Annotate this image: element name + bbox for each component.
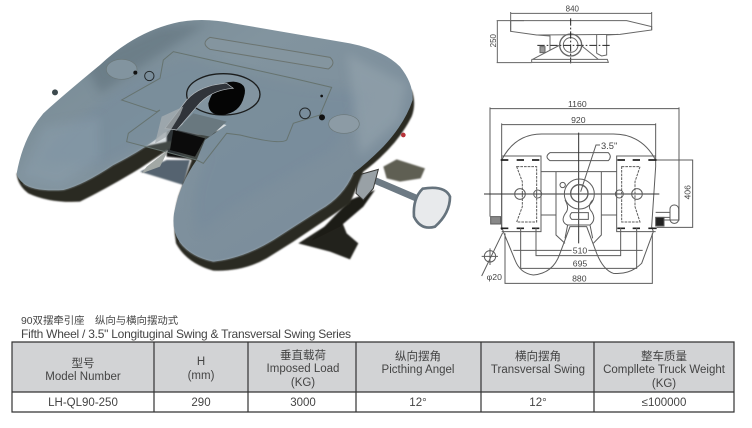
chinese heading: 90双摆牵引座 xyxy=(21,314,85,327)
red indicator xyxy=(401,133,406,137)
dimension 510 xyxy=(513,227,643,256)
specification table xyxy=(12,342,734,412)
dimension 695: 695 xyxy=(573,259,587,269)
dimension 250: 250 xyxy=(489,33,498,47)
column: transversal swing: 横向摆角 xyxy=(515,349,561,363)
angle label 3.5: 3.5" xyxy=(601,141,617,151)
column: model number xyxy=(45,356,121,409)
kingpin ring and opening xyxy=(142,74,260,173)
release handle detail xyxy=(491,205,679,226)
mounting bracket under plate xyxy=(140,127,375,259)
column: H: (mm) xyxy=(188,370,215,382)
dimension 1160: 1160 xyxy=(568,99,587,109)
dimension 406: 406 xyxy=(682,185,692,200)
column: transversal swing xyxy=(491,349,585,409)
column: pitching angle: 纵向摆角 xyxy=(395,349,441,363)
plan view drawing xyxy=(482,99,693,283)
column: truck weight: (KG) xyxy=(652,378,676,390)
column: H: 290 xyxy=(191,397,211,409)
centre kingpin housing xyxy=(541,172,617,243)
top slot xyxy=(547,153,610,161)
dimension 695 xyxy=(521,227,637,269)
column: imposed load: Imposed Load xyxy=(267,363,339,375)
front edge highlight xyxy=(23,133,353,262)
release handle xyxy=(356,169,450,228)
dimension 840: 840 xyxy=(566,5,580,14)
side profile xyxy=(511,18,652,63)
bolt caps xyxy=(106,59,137,79)
embossed slot xyxy=(205,37,333,69)
rear lock plate xyxy=(383,159,425,182)
surface shading xyxy=(183,123,226,148)
right mounting plate xyxy=(615,156,657,232)
plate edge (dark underside) xyxy=(17,90,414,271)
column: truck weight: 整车质量 xyxy=(641,349,687,363)
column: pitching angle xyxy=(382,349,454,409)
dimension 250 xyxy=(489,21,532,63)
side knob xyxy=(52,89,58,95)
table grid xyxy=(12,342,734,412)
dimension 510: 510 xyxy=(573,245,587,255)
column: model number: LH-QL90-250 xyxy=(48,397,118,409)
dimension 406 xyxy=(657,160,693,227)
column: transversal swing: Transversal Swing xyxy=(491,364,585,376)
column: transversal swing: 12° xyxy=(529,397,547,409)
column: imposed load: 垂直载荷 xyxy=(280,348,326,362)
dimension 920: 920 xyxy=(571,115,586,125)
column: pitching angle: 12° xyxy=(409,397,427,409)
column: truck weight: Compllete Truck Weight xyxy=(603,364,726,376)
side view drawing xyxy=(489,5,652,63)
hole callout xyxy=(482,233,503,282)
dimension 920 xyxy=(502,115,656,230)
plate top surface xyxy=(16,20,413,262)
column: H xyxy=(188,356,215,409)
column: imposed load xyxy=(267,348,339,409)
chinese heading: 纵向与横向摆动式 xyxy=(95,314,179,327)
hole callout: φ20 xyxy=(487,272,502,282)
column: model number: Model Number xyxy=(45,371,121,383)
dimension 880 xyxy=(505,233,652,283)
plate outline xyxy=(502,134,656,275)
column: pitching angle: Picthing Angel xyxy=(382,364,454,376)
column: imposed load: (KG) xyxy=(291,377,315,389)
dimension 840 xyxy=(511,5,652,32)
left mounting plate xyxy=(501,156,542,232)
english heading: Fifth Wheel / 3.5" Longituginal Swing & Transversal Swing Series xyxy=(21,327,351,341)
product photo: fifth wheel coupling xyxy=(16,20,452,272)
column: truck weight xyxy=(603,349,726,409)
table header background xyxy=(12,342,734,392)
column: truck weight: ≤100000 xyxy=(642,397,686,409)
angle label 3.5 xyxy=(581,141,617,192)
chinese heading xyxy=(21,314,179,327)
embossed centre plate xyxy=(122,52,332,163)
centre line xyxy=(484,133,659,243)
column: imposed load: 3000 xyxy=(290,397,316,409)
column: H: H xyxy=(197,356,205,368)
dimension 1160 xyxy=(490,99,679,220)
dimension 880: 880 xyxy=(572,273,587,283)
column: model number: 型号 xyxy=(72,356,94,370)
